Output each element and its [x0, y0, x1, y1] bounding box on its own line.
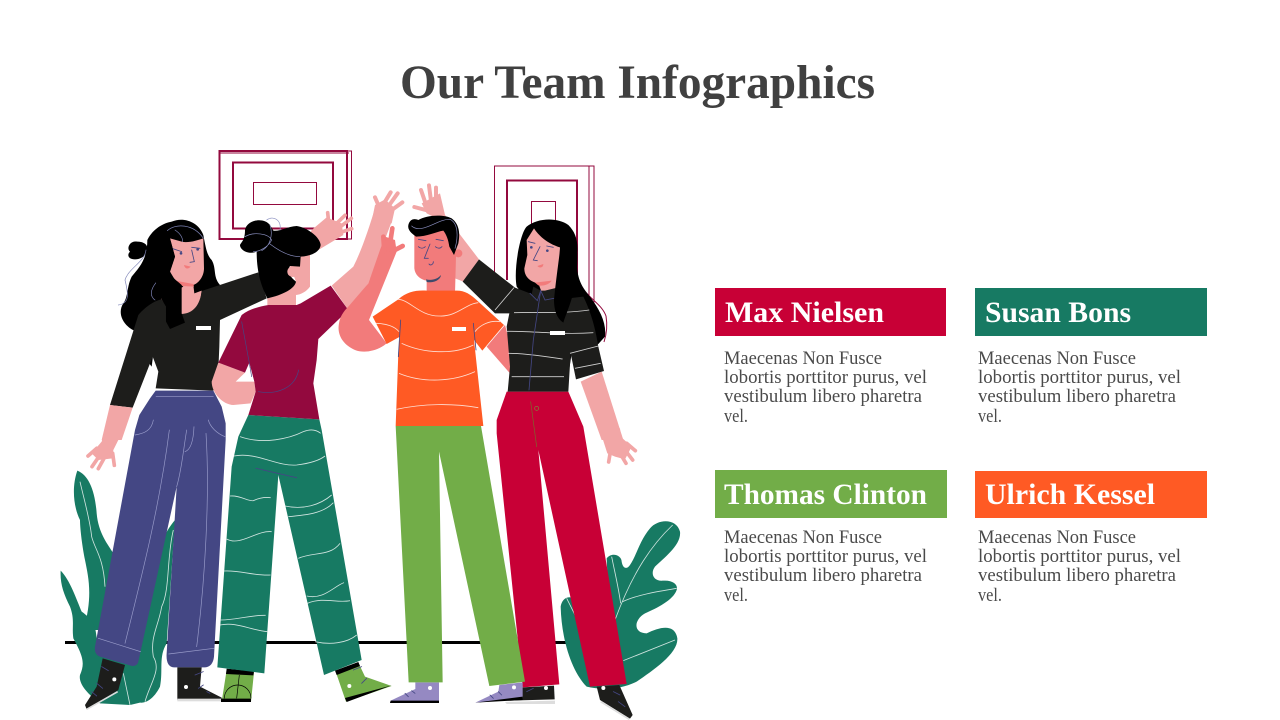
neck and face [414, 230, 456, 293]
face and neck [524, 228, 560, 297]
right shoe [597, 685, 633, 719]
name: Ulrich Kessel [985, 478, 1155, 511]
person: woman in black striped shirt, raised forearm [414, 185, 479, 282]
name badge [452, 327, 466, 331]
description: lobortis porttitor purus, vel [978, 367, 1181, 388]
arm [102, 405, 133, 440]
card: Ulrich Kessel [975, 471, 1207, 606]
lower hand [88, 428, 125, 469]
name: Susan Bons [985, 296, 1131, 329]
left arm [212, 363, 256, 405]
left shoe [505, 686, 555, 704]
description: vestibulum libero pharetra [978, 565, 1177, 586]
description: Maecenas Non Fusce [978, 527, 1136, 548]
person: woman in striped shirt, red trousers and shoes [497, 392, 635, 719]
face and neck [161, 238, 204, 315]
picture frame: right [494, 166, 607, 342]
arm [581, 372, 623, 440]
description: vel. [724, 585, 748, 606]
right shoe [177, 667, 222, 701]
description: lobortis porttitor purus, vel [724, 546, 927, 567]
jeans [95, 391, 226, 667]
left shoe [390, 682, 439, 703]
description [724, 527, 927, 606]
description: Maecenas Non Fusce [724, 348, 882, 369]
name banner [715, 470, 947, 518]
card: Susan Bons [975, 288, 1207, 427]
top [218, 286, 348, 419]
hair: front strand [153, 238, 185, 329]
name banner [975, 471, 1207, 518]
floor line [65, 641, 575, 644]
description: Maecenas Non Fusce [978, 348, 1136, 369]
description [724, 348, 927, 427]
plant: right leaf [561, 521, 680, 689]
card: Max Nielsen [715, 288, 946, 427]
description: vel. [978, 406, 1002, 427]
ear [287, 266, 298, 277]
description: vestibulum libero pharetra [978, 386, 1177, 407]
plant: left leaves [61, 471, 175, 705]
left shoe [85, 658, 125, 709]
raised hand [372, 192, 402, 223]
description: vel. [978, 585, 1002, 606]
hair [408, 216, 459, 255]
description: lobortis porttitor purus, vel [978, 546, 1181, 567]
hair [240, 220, 321, 298]
face details [418, 239, 443, 265]
hair: back [121, 220, 220, 367]
right shoe [475, 682, 523, 703]
hair: back [516, 220, 605, 375]
right shoe [335, 662, 392, 702]
hair: front strand [547, 225, 577, 323]
trousers [497, 392, 627, 687]
lower hand [599, 428, 635, 463]
name: Thomas Clinton [724, 478, 927, 511]
name badge [550, 331, 565, 335]
description [978, 348, 1181, 427]
name banner [975, 288, 1207, 336]
description: vestibulum libero pharetra [724, 565, 923, 586]
person: man in orange shirt [339, 216, 525, 703]
person: woman in striped shirt, torso [463, 220, 623, 440]
raised hand [301, 213, 352, 255]
picture frame: left [220, 151, 352, 239]
shirt [463, 259, 604, 392]
person: woman in black top and blue jeans [85, 213, 352, 709]
description: Maecenas Non Fusce [724, 527, 882, 548]
name: Max Nielsen [725, 296, 884, 329]
trousers [217, 415, 362, 675]
card: Thomas Clinton [715, 470, 947, 606]
raised arm [332, 208, 392, 310]
title: Our Team Infographics [400, 56, 875, 109]
description: vestibulum libero pharetra [724, 386, 923, 407]
description: lobortis porttitor purus, vel [724, 367, 927, 388]
shirt [110, 272, 267, 408]
name banner [715, 288, 946, 336]
name badge [196, 326, 211, 330]
t-shirt [373, 291, 504, 426]
person: woman in maroon top and green trousers [212, 192, 402, 702]
description: vel. [724, 406, 748, 427]
description [978, 527, 1181, 606]
left shoe [221, 669, 254, 702]
head skin [267, 253, 310, 305]
raised arm [339, 228, 512, 373]
trousers [396, 426, 525, 686]
